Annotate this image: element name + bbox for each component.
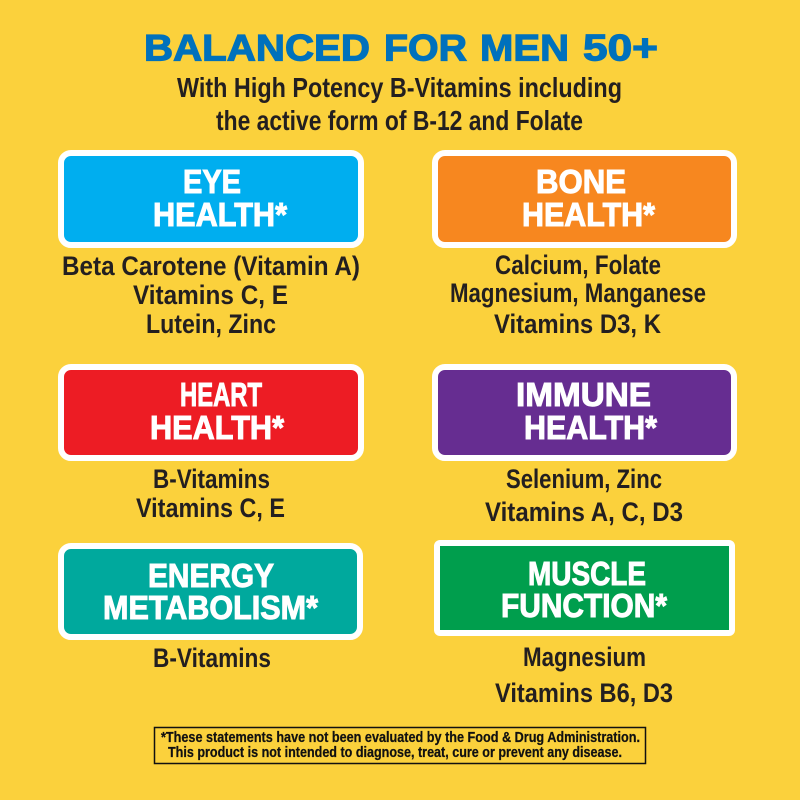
badge: heart health [61,367,361,458]
nutrients: muscle function [495,642,673,708]
nutrients: muscle function: Magnesium [523,642,646,672]
nutrients: heart health [136,464,285,523]
title: 50+ [583,28,658,68]
panel: eye health [61,153,361,339]
nutrients: eye health: Lutein, Zinc [146,309,276,339]
panel: bone health [435,153,734,339]
nutrients: immune health: Vitamins A, C, D3 [485,497,683,527]
panel: energy metabolism [61,546,360,673]
subtitle [177,72,622,136]
title: FOR [384,28,467,68]
panel: muscle function [437,543,732,708]
badge: eye health: EYE [183,163,241,200]
badge: eye health [61,153,361,245]
nutrients: energy metabolism: B-Vitamins [153,643,271,673]
subtitle: the active form of B-12 and Folate [216,105,583,136]
badge: energy metabolism: METABOLISM* [103,589,318,626]
nutrients: eye health: Vitamins C, E [133,280,288,310]
badge: immune health: IMMUNE [516,376,651,413]
badge: muscle function: FUNCTION* [501,587,667,624]
disclaimer box: This product is not intended to diagnose, treat, cure or prevent any disease. [168,744,622,761]
nutrients: heart health: B-Vitamins [153,464,270,494]
nutrients: eye health: Beta Carotene (Vitamin A) [62,251,360,281]
badge: bone health [435,153,734,245]
title: MEN [480,28,569,68]
nutrients: bone health: Calcium, Folate [495,250,661,280]
title: BALANCED [144,28,370,68]
panel: heart health [61,367,361,523]
badge: heart health: HEALTH* [150,409,284,446]
title [144,28,658,68]
nutrients: eye health [62,251,360,339]
badge: immune health [435,367,734,458]
panel: immune health [435,367,734,527]
badge: energy metabolism [61,546,360,637]
subtitle: With High Potency B-Vitamins including [177,72,622,103]
badge: eye health: HEALTH* [153,196,287,233]
badge: muscle function [437,543,732,633]
badge: bone health: BONE [536,163,626,200]
nutrients: bone health: Magnesium, Manganese [450,278,706,308]
badge: energy metabolism: ENERGY [148,557,274,594]
badge: immune health: HEALTH* [524,409,657,446]
nutrients: bone health [450,250,706,339]
nutrients: immune health: Selenium, Zinc [506,464,662,494]
disclaimer box: *These statements have not been evaluated by the Food & Drug Administration. [161,729,640,746]
disclaimer box [154,728,646,764]
nutrients: muscle function: Vitamins B6, D3 [495,678,673,708]
nutrients: bone health: Vitamins D3, K [494,309,661,339]
nutrients: immune health [485,464,683,527]
badge: muscle function: MUSCLE [528,555,646,592]
badge: heart health: HEART [180,376,262,413]
nutrients: heart health: Vitamins C, E [136,493,285,523]
badge: bone health: HEALTH* [522,196,655,233]
